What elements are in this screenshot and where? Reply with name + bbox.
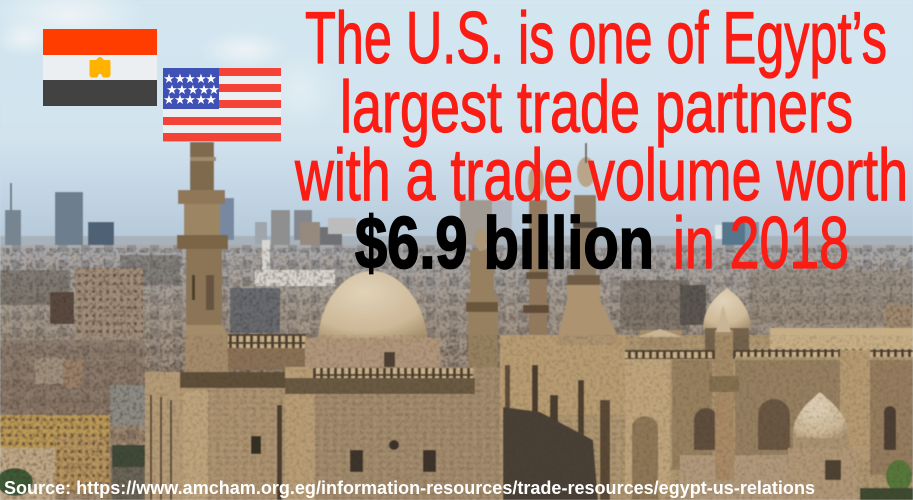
highlighted value: $6.9 billion <box>355 203 654 284</box>
background: sky <box>0 0 913 250</box>
mosque texture <box>145 335 913 500</box>
title: in 2018 <box>673 203 849 284</box>
icon: American flag: ★ <box>205 71 217 86</box>
icon: American flag: ★ <box>174 92 186 107</box>
icon: American flag: ★ <box>184 92 196 107</box>
icon: American flag: ★ <box>205 92 217 107</box>
mosque: small dome <box>788 392 858 500</box>
icon: American flag: ★ <box>195 71 207 86</box>
icon: American flag: ★ <box>208 82 220 97</box>
mosque: near minaret <box>466 229 500 500</box>
icon: American flag: ★ <box>176 82 188 97</box>
icon: American flag: ★ <box>166 82 178 97</box>
icon: American flag: ★ <box>163 71 175 86</box>
background: distant skyline <box>0 183 913 266</box>
tree <box>860 460 913 500</box>
mosque: right complex <box>500 328 913 500</box>
source text: Source: https://www.amcham.org.eg/information-resources/trade-resources/egypt-us-relations <box>4 477 815 498</box>
background: city buildings <box>0 240 913 500</box>
title <box>294 0 908 284</box>
mosque: twin minarets <box>523 143 622 345</box>
mosque: main facade <box>145 367 500 500</box>
icon: American flag: ★ <box>174 71 186 86</box>
icon: American flag: ★ <box>195 92 207 107</box>
icon: American flag: ★ <box>184 71 196 86</box>
mosque: left minaret <box>177 142 228 372</box>
icon: Egyptian flag <box>43 29 157 106</box>
icon: American flag: ★ <box>198 82 210 97</box>
city texture <box>0 248 913 500</box>
mosque: right dome <box>703 288 751 350</box>
icon: American flag: ★ <box>187 82 199 97</box>
mosque: small minaret <box>709 305 739 480</box>
icon: American flag: ★ <box>163 92 175 107</box>
icon: American flag <box>163 68 281 142</box>
mosque: main dome <box>225 271 440 372</box>
